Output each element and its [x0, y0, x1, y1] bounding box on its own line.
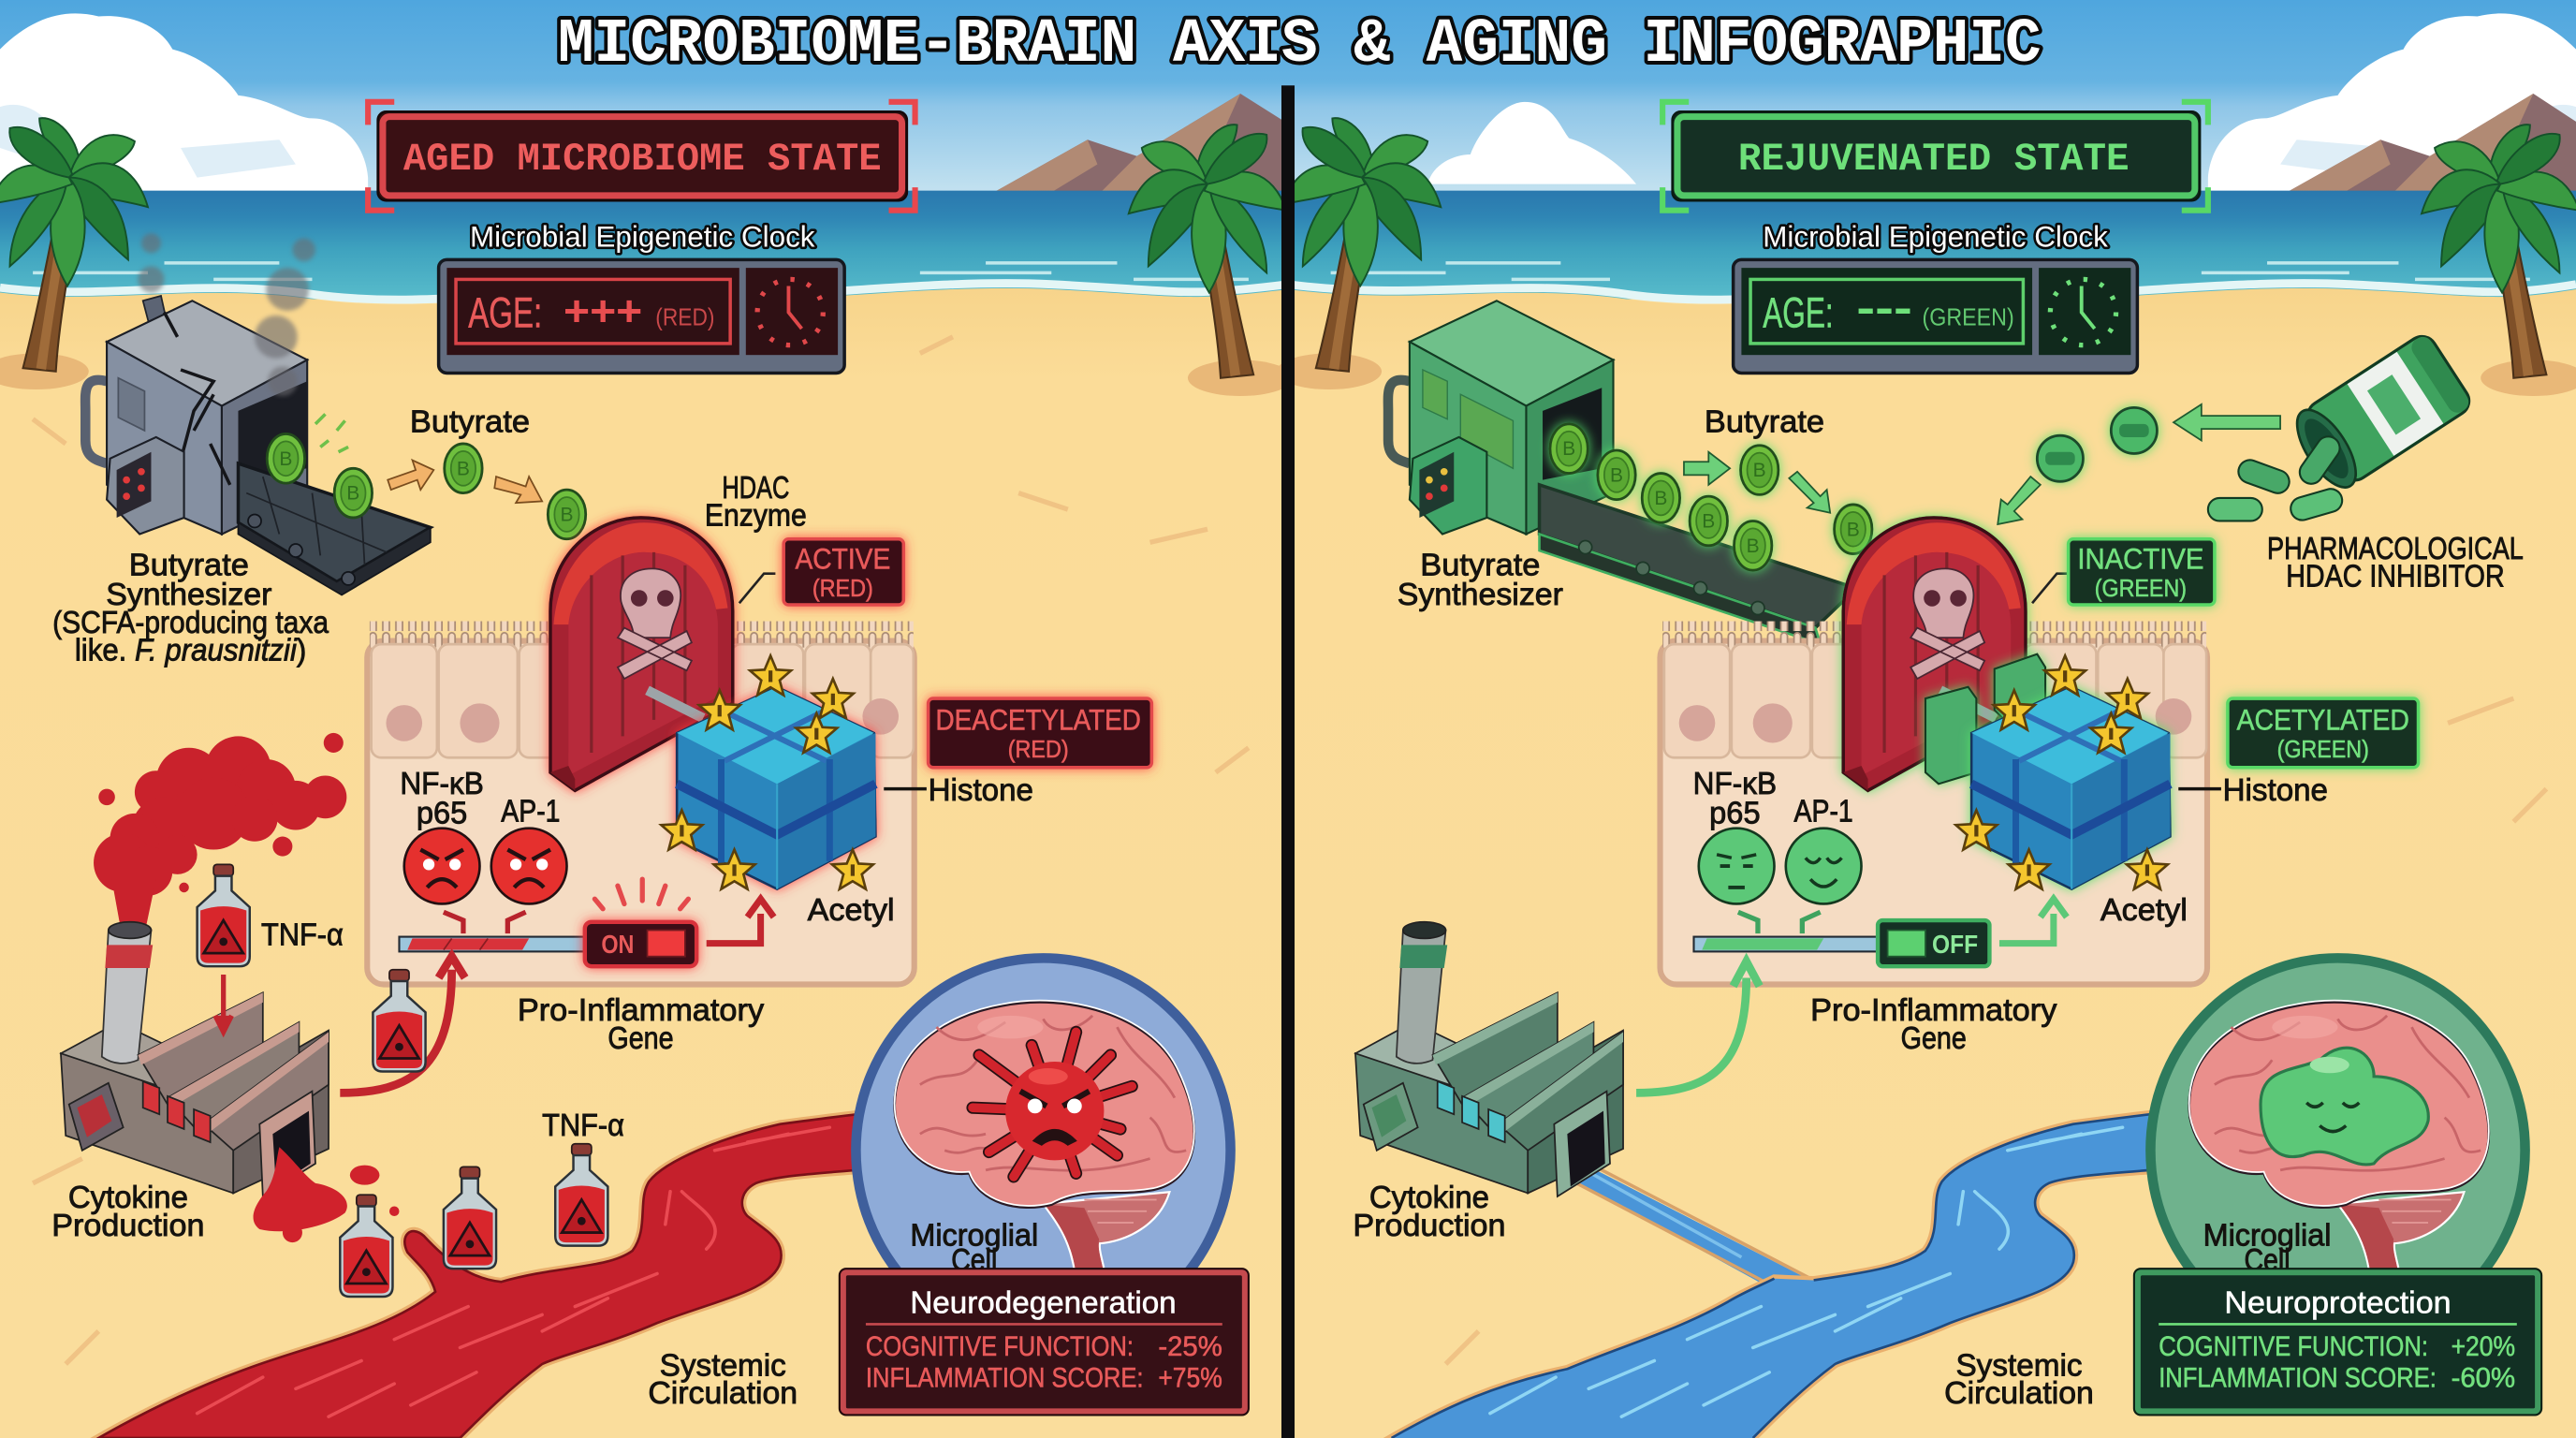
label: cytokine production: [51, 1181, 205, 1243]
background: sea: [0, 191, 2576, 299]
butyrate coins: B: [1654, 488, 1667, 509]
butyrate coins: B: [1847, 519, 1860, 540]
clock heading: Microbial Epigenetic Clock: [470, 219, 815, 253]
butyrate coins: B: [1610, 464, 1623, 486]
icon: activated microglia: [973, 1032, 1132, 1177]
label: microglial cell: [2203, 1219, 2331, 1278]
inhibitor coins: [2037, 407, 2157, 481]
transcription factors: NF-kB p65 and AP-1 labels: AP-1: [501, 795, 560, 829]
label: pro-inflammatory gene: Gene: [1901, 1021, 1967, 1056]
status badge: active: ACTIVE: [795, 541, 890, 575]
HDAC enzyme door: [550, 518, 733, 790]
outcome panel: neuroprotection: INFLAMMATION SCORE:: [2159, 1363, 2437, 1394]
status badge: deacetylated: [929, 698, 1151, 768]
icon: calm AP-1 face: [1786, 829, 1862, 903]
status badge: acetylated: (GREEN): [2277, 735, 2369, 763]
epigenetic clock panel: [1734, 259, 2137, 373]
status badge: inactive: INACTIVE: [2077, 541, 2203, 575]
spill at factory door: [254, 1147, 399, 1242]
butyrate coins: B: [560, 504, 574, 525]
arrow: inhibitor to door: [1998, 477, 2041, 524]
label: microglial cell: Microglial: [2203, 1219, 2331, 1254]
label: butyrate synthesizer: Synthesizer: [106, 578, 271, 612]
butyrate synthesizer machine (damaged): [85, 296, 431, 594]
outcome panel: neuroprotection: COGNITIVE FUNCTION:: [2159, 1331, 2428, 1362]
smoke: red cytokines: [94, 733, 346, 933]
label: butyrate synthesizer: like. F. prausnitzii): [75, 634, 306, 668]
transcription factor labels: AP-1: [1794, 795, 1853, 829]
outcome panel: neurodegeneration: Neurodegeneration: [910, 1286, 1177, 1321]
butyrate coins: B: [457, 458, 470, 479]
label: histone: Histone: [2223, 773, 2328, 808]
label: HDAC enzyme: HDAC: [722, 471, 789, 506]
icon: angry NF-kB face: [404, 829, 479, 903]
background: clouds: [0, 13, 2576, 194]
arrow: switch to histone: [707, 899, 774, 944]
label: pharmacological HDAC inhibitor: [2267, 532, 2524, 594]
status badge: inactive: [2032, 539, 2215, 605]
epigenetic clock panel: AGE:: [1763, 288, 1834, 336]
arrows: butyrate flow: [1684, 452, 1830, 513]
palm tree: right panel left: [1277, 118, 1441, 389]
background: foam line: [0, 284, 2576, 300]
arrow: factory up to gene: [340, 957, 465, 1093]
arrows: factors to gene: [444, 912, 526, 933]
background: sky: [0, 0, 2576, 194]
label: systemic circulation: Systemic: [1955, 1348, 2083, 1383]
gene bar with OFF switch: [1694, 920, 1989, 966]
label: microglial cell: [910, 1219, 1038, 1278]
butyrate coins: B: [1753, 460, 1766, 481]
butyrate coins: B: [1562, 438, 1575, 460]
state heading: aged: [368, 102, 915, 211]
epigenetic clock panel: [439, 259, 844, 373]
transcription factors: NF-kB p65 and AP-1 labels: [400, 767, 560, 830]
outcome panel: neurodegeneration: +75%: [1158, 1363, 1222, 1394]
label: butyrate: Butyrate: [410, 405, 530, 440]
inhibitor blocks: [1925, 654, 2045, 784]
acetyl stars: [661, 655, 873, 889]
label: cytokine production: [1353, 1181, 1506, 1243]
label: butyrate synthesizer: Butyrate: [1420, 548, 1540, 582]
epigenetic clock panel: ---: [1856, 284, 1912, 331]
TNF-alpha vial on arrow: [373, 970, 426, 1072]
brain lens circle (blue): [856, 958, 1231, 1343]
label: butyrate synthesizer: Butyrate: [129, 548, 249, 582]
arrow: inhibitor from bottle: [2174, 404, 2280, 440]
icon: angry AP-1 face: [491, 829, 567, 903]
status badge: active: [739, 539, 903, 605]
status badge: deacetylated: DEACETYLATED: [936, 702, 1141, 736]
epigenetic clock panel: +++: [564, 287, 642, 335]
background: sand: [0, 288, 2576, 1438]
machine smoke: [138, 233, 315, 396]
clock heading: Microbial Epigenetic Clock: [1763, 219, 2108, 253]
TNF-alpha vials in bloodstream: [340, 1144, 607, 1297]
acetyl stars: [1955, 655, 2168, 889]
nucleus panel with gut cells: [367, 622, 915, 985]
brain: [2189, 1001, 2489, 1273]
label: cytokine production: Production: [1353, 1209, 1506, 1243]
label: butyrate synthesizer: Synthesizer: [1398, 578, 1563, 612]
butyrate coins: [1550, 424, 1872, 570]
arrow: factory up to gene: [1636, 961, 1760, 1093]
label: butyrate synthesizer: [1398, 548, 1563, 612]
butyrate coins: B: [346, 483, 359, 505]
label: pharmacological HDAC inhibitor: HDAC INHIBITOR: [2286, 560, 2505, 594]
arrows: factors to gene: [1738, 912, 1821, 933]
butyrate coins: [267, 414, 586, 539]
title: MICROBIOME-BRAIN AXIS & AGING INFOGRAPHIC: [558, 9, 2042, 81]
label: systemic circulation: [648, 1348, 798, 1411]
outcome panel: neuroprotection: -60%: [2452, 1363, 2515, 1394]
state heading: rejuvenated: REJUVENATED STATE: [1738, 137, 2130, 182]
label: systemic circulation: Circulation: [648, 1376, 798, 1411]
palm tree: left panel right: [1129, 125, 1293, 396]
label: acetyl: Acetyl: [808, 893, 895, 928]
butyrate synthesizer machine (healthy): [1388, 301, 1614, 535]
panel: aged microbiome state (left): [51, 102, 1249, 1438]
label: pro-inflammatory gene: Pro-Inflammatory: [518, 993, 764, 1028]
brain: [895, 1001, 1194, 1273]
histone cube: [1971, 687, 2170, 889]
gene bar with ON switch: [399, 879, 696, 966]
status badge: inactive: (GREEN): [2095, 574, 2187, 602]
central divider: [1281, 85, 1295, 1438]
cytokine factory (red): [61, 922, 329, 1196]
outcome panel: neuroprotection: +20%: [2452, 1331, 2515, 1362]
label: butyrate: Butyrate: [1705, 405, 1824, 440]
label: systemic circulation: Circulation: [1944, 1376, 2094, 1411]
systemic circulation river (red): [98, 1114, 857, 1438]
gene bar with OFF switch: OFF: [1932, 930, 1978, 959]
outcome panel: neurodegeneration: COGNITIVE FUNCTION:: [866, 1331, 1134, 1362]
transcription factor labels: NF-κB: [1693, 767, 1777, 801]
label: pro-inflammatory gene: Pro-Inflammatory: [1810, 993, 2057, 1028]
label: systemic circulation: [1944, 1348, 2094, 1411]
palm tree: left panel left: [0, 118, 148, 389]
label: pro-inflammatory gene: [1810, 993, 2057, 1056]
state heading: rejuvenated: [1662, 102, 2208, 211]
label: cytokine production: Cytokine: [68, 1181, 188, 1215]
transcription factors: NF-kB p65 and AP-1 labels: NF-κB: [400, 767, 484, 801]
long conveyor belt: [1540, 485, 1856, 644]
label: pharmacological HDAC inhibitor: PHARMACOLOGICAL: [2267, 532, 2524, 566]
transcription factors: NF-kB p65 and AP-1 labels: p65: [417, 796, 467, 830]
transcription factor labels: p65: [1709, 796, 1761, 830]
butyrate coins: B: [1702, 510, 1715, 532]
label: HDAC enzyme: Enzyme: [705, 499, 807, 534]
arrows: butyrate flow: [388, 461, 542, 503]
label: histone: Histone: [929, 773, 1033, 808]
outcome panel: neurodegeneration: INFLAMMATION SCORE:: [866, 1363, 1144, 1394]
TNF-alpha vial by factory: [198, 864, 250, 966]
background: mountains: [994, 94, 2576, 192]
status badge: acetylated: [2228, 698, 2419, 768]
status badge: deacetylated: (RED): [1008, 735, 1069, 763]
icon: calm microglia: [2261, 1048, 2428, 1165]
transcription factor labels: [1693, 767, 1853, 830]
outcome panel: neurodegeneration: -25%: [1158, 1331, 1222, 1362]
label: HDAC enzyme: [705, 471, 807, 534]
label: microglial cell: Cell: [2244, 1243, 2291, 1278]
nucleus panel with gut cells: [1661, 622, 2207, 985]
histone cube: [677, 687, 875, 889]
label: acetyl: Acetyl: [2100, 893, 2188, 928]
label: pro-inflammatory gene: [518, 993, 764, 1056]
epigenetic clock panel: (RED): [655, 303, 714, 331]
panel: rejuvenated state (right): [1353, 102, 2541, 1438]
cytokine factory (green): [1355, 922, 1623, 1196]
label: microglial cell: Cell: [951, 1243, 997, 1278]
icon: neutral NF-kB face: [1699, 829, 1775, 903]
label: microglial cell: Microglial: [910, 1219, 1038, 1254]
label: butyrate synthesizer: (SCFA-producing taxa: [52, 606, 329, 640]
status badge: active: (RED): [812, 574, 873, 602]
outcome panel: neuroprotection: Neuroprotection: [2224, 1286, 2452, 1321]
epigenetic clock panel: AGE:: [468, 288, 542, 336]
label: cytokine production: Cytokine: [1369, 1181, 1489, 1215]
outcome panel: neuroprotection: [2134, 1269, 2541, 1415]
systemic circulation river (blue): [1392, 1114, 2150, 1438]
HDAC enzyme door (blocked): [1843, 518, 2026, 790]
brain lens circle (green): [2150, 958, 2525, 1343]
arrow: switch to histone: [1999, 899, 2067, 944]
state heading: aged: AGED MICROBIOME STATE: [403, 137, 882, 182]
gene bar with ON switch: ON: [601, 930, 634, 959]
status badge: acetylated: ACETYLATED: [2237, 702, 2409, 736]
label: butyrate synthesizer: [52, 548, 329, 668]
icon: pharmacological pill bottle: [2208, 330, 2475, 522]
label: pro-inflammatory gene: Gene: [607, 1021, 674, 1056]
label: TNF-alpha bloodstream: TNF-α: [542, 1108, 624, 1143]
palm tree: right panel right: [2422, 125, 2576, 396]
epigenetic clock panel: (GREEN): [1922, 303, 2014, 331]
butyrate coins: B: [279, 448, 292, 470]
label: cytokine production: Production: [51, 1209, 205, 1243]
label: systemic circulation: Systemic: [660, 1348, 786, 1383]
outcome panel: neurodegeneration: [840, 1269, 1249, 1415]
label: TNF-alpha: TNF-α: [261, 917, 344, 952]
clean channel from factory: [1567, 1152, 1817, 1287]
butyrate coins: B: [1747, 536, 1760, 557]
arrow: vial into factory: [215, 975, 231, 1032]
